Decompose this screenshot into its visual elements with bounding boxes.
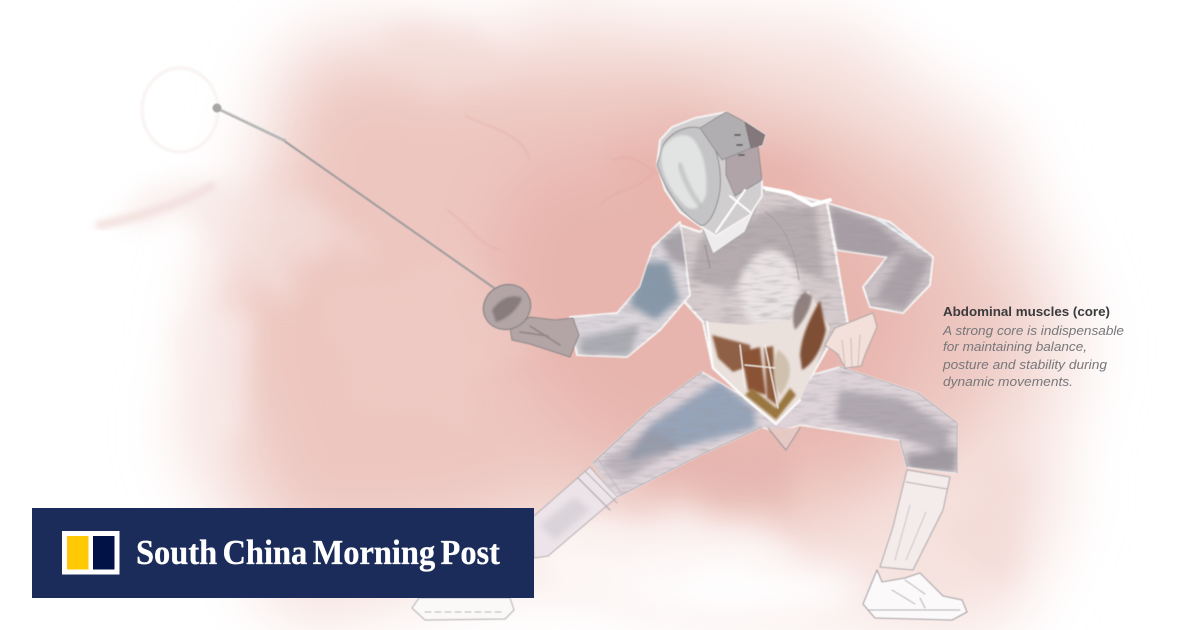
free hand bbox=[825, 313, 877, 368]
back arm sleeve bbox=[825, 200, 935, 315]
front shoe bbox=[863, 570, 967, 620]
annotation body text: dynamic movements. bbox=[943, 374, 1073, 389]
annotation body text bbox=[942, 323, 1124, 389]
abdominal muscles bbox=[706, 290, 830, 424]
front lower leg bbox=[880, 470, 950, 570]
logo banner bbox=[32, 508, 534, 598]
fencer bbox=[212, 104, 967, 620]
rear lower leg bbox=[533, 467, 617, 558]
sword arm sleeve bbox=[568, 220, 695, 360]
annotation: abdominal muscles bbox=[942, 304, 1124, 389]
annotation body text: posture and stability during bbox=[942, 357, 1108, 372]
fencing mask bbox=[657, 112, 765, 254]
glove bbox=[510, 317, 579, 357]
jacket bbox=[681, 186, 850, 390]
annotation body text: for maintaining balance, bbox=[943, 339, 1087, 354]
annotation heading: Abdominal muscles (core) bbox=[943, 304, 1110, 319]
breeches bbox=[590, 365, 960, 500]
logo icon bbox=[62, 531, 120, 574]
rear shoe bbox=[412, 598, 514, 620]
crotch strap bbox=[768, 428, 800, 450]
foil blade bbox=[212, 104, 497, 290]
annotation body text: A strong core is indispensable bbox=[942, 323, 1124, 338]
logo wordmark: South China Morning Post bbox=[136, 533, 500, 572]
bell guard bbox=[475, 276, 539, 338]
